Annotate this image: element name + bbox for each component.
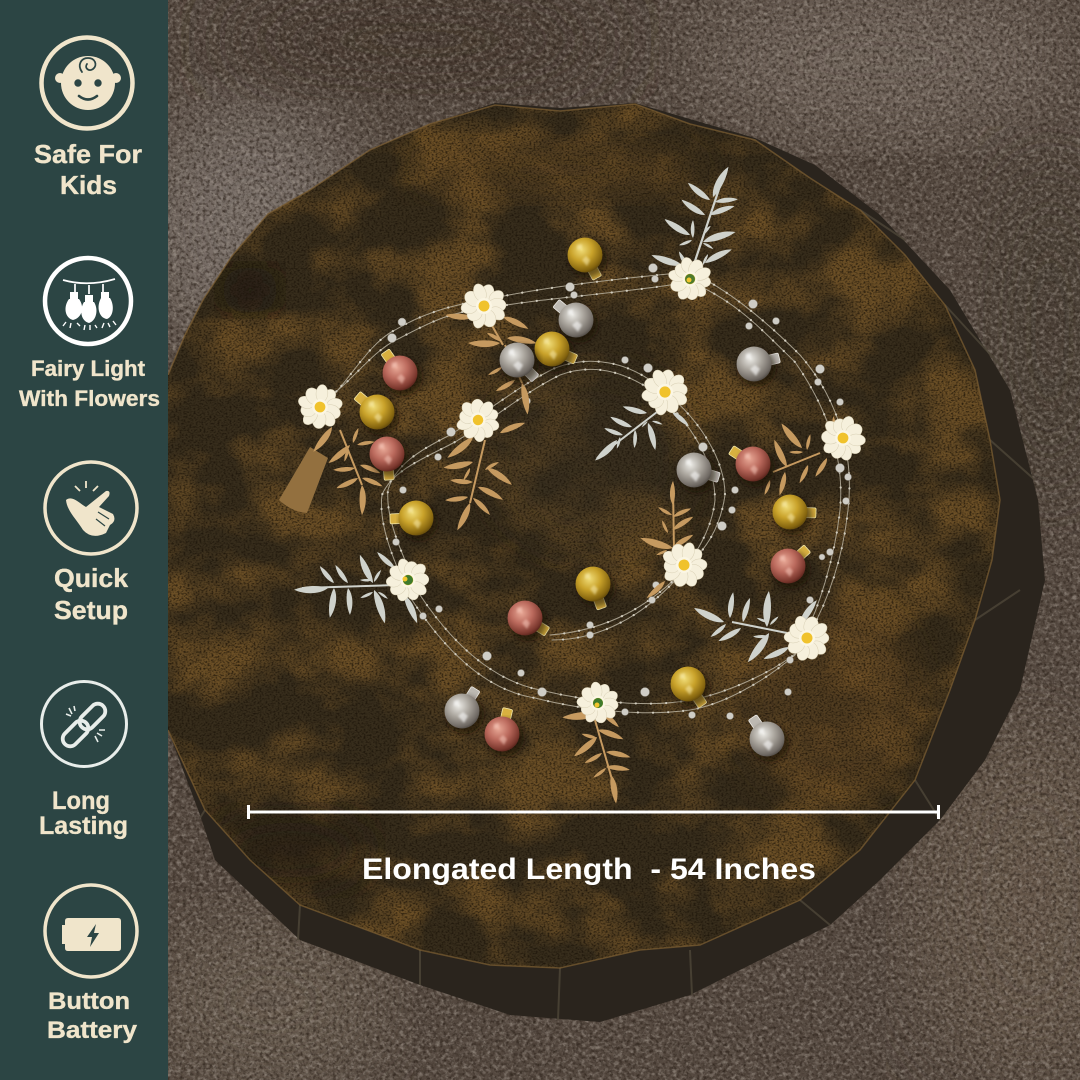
silver branch at lower-right flower <box>692 591 819 665</box>
label: button battery: Battery <box>47 1017 138 1044</box>
silver branch at top <box>650 165 738 269</box>
icon: chain link <box>42 682 126 766</box>
silver branch at lower-left flower <box>294 550 421 624</box>
panel: table side facets <box>200 210 1035 1020</box>
label: safe for kids: Safe For <box>34 139 142 169</box>
white daisy flowers <box>288 253 875 732</box>
gold branch at right flower <box>763 416 837 496</box>
panel: table top surface <box>160 95 1010 975</box>
feature: long lasting <box>39 682 128 840</box>
feature: button battery <box>45 885 138 1044</box>
feature: quick setup <box>45 462 137 625</box>
ornament balls: gold, silver, rose <box>354 238 816 762</box>
label: safe for kids: Kids <box>60 170 117 200</box>
dimension line: elongated length <box>247 805 940 819</box>
icon: string of lights <box>45 258 131 344</box>
panel: round wooden table side <box>168 103 1045 1022</box>
gold branch under left flower <box>311 425 383 515</box>
icon: battery with bolt <box>45 885 137 977</box>
gold branch under centre-left flower <box>443 420 526 532</box>
label: fairy light with flowers: With Flowers <box>19 386 160 411</box>
large pearls on the strands <box>388 264 852 720</box>
battery tube of the fairy light <box>279 447 328 513</box>
label: long lasting: Long <box>52 787 110 815</box>
table rim highlight <box>168 104 1000 968</box>
dimension label: Elongated Length - 54 Inches <box>362 853 816 886</box>
label: fairy light with flowers: Fairy Light <box>31 356 146 381</box>
feature: safe for kids <box>34 38 142 200</box>
feature: fairy light with flowers <box>19 258 160 411</box>
silver branch under centre flower <box>593 405 691 463</box>
label: button battery: Button <box>48 988 130 1015</box>
label: quick setup: Setup <box>54 595 128 625</box>
icon: finger snap hand <box>45 462 137 554</box>
gold branch above lower centre flower <box>639 481 694 600</box>
panel: left feature sidebar <box>0 0 168 1080</box>
label: long lasting: Lasting <box>39 812 128 840</box>
icon: baby face <box>42 38 132 128</box>
fairy light strands with pearls <box>320 272 849 713</box>
gold branch at bottom flower <box>562 710 631 804</box>
label: quick setup: Quick <box>54 563 129 593</box>
gold branch under top-left flower <box>445 313 537 415</box>
